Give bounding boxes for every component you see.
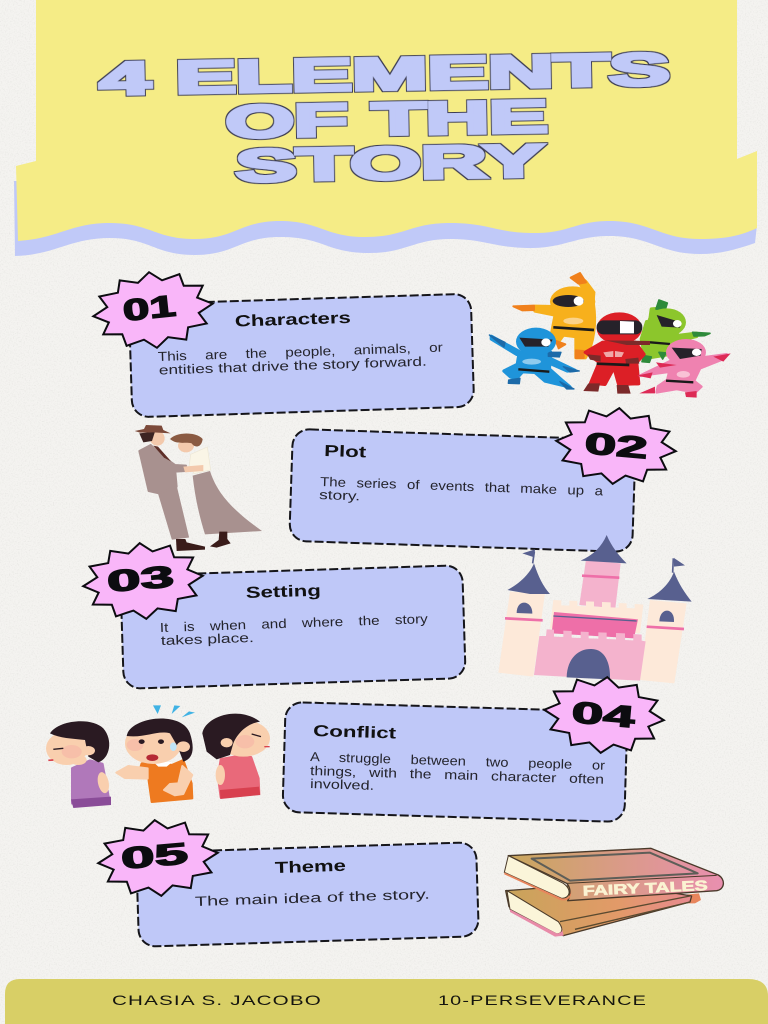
title [99,44,670,191]
panel: plot: Plot [324,443,367,461]
red ranger [583,312,650,394]
panel: plot: The series of events that make up a [320,474,604,498]
man [135,425,205,551]
woman [170,433,262,548]
blue ranger [489,328,579,389]
title: OF THE [225,91,548,147]
panel: theme: 05 [120,837,189,876]
sweat drops [153,705,195,717]
panel: conflict: A struggle between two people or [310,749,606,773]
panel: theme: Theme [275,858,346,877]
book title: FAIRY TALES [582,877,708,899]
panel: setting: 03 [106,560,175,599]
panel: conflict: things, with the main character often [310,763,604,787]
panel: conflict: 04 [570,696,637,735]
panel: setting: takes place. [161,630,254,648]
lower book [506,883,701,937]
header banner [14,0,757,256]
panel: conflict [282,672,667,822]
panel: characters: 01 [121,290,177,328]
class section: 10-PERSEVERANCE [438,992,647,1008]
panel: characters: entities that drive the story forward. [159,354,427,377]
upper book [504,848,723,901]
panel: plot: story. [319,487,360,503]
author name: CHASIA S. JACOBO [112,992,322,1008]
middle child [116,718,193,802]
pink ranger [637,339,731,398]
illustration: three children [46,705,270,808]
panel: characters: Characters [235,310,351,330]
right child [202,714,270,799]
left child [46,721,111,808]
title: STORY [235,135,544,191]
illustration: five colourful rangers [489,273,731,398]
panel: theme [95,815,479,947]
panel: setting: Setting [246,583,321,602]
panel: plot [289,403,679,552]
panel: theme: The main idea of the story. [195,887,430,909]
panel: setting [80,538,466,689]
panel: plot: 02 [583,427,649,465]
panel: conflict: involved. [310,776,374,793]
green ranger [641,300,710,362]
illustration: couple embracing [135,425,262,551]
title: 4 ELEMENTS [99,44,670,104]
panel: conflict: Conflict [313,723,397,742]
illustration: pink castle [498,535,692,683]
panel: characters [89,266,474,417]
footer bar [5,979,768,1024]
illustration: stacked fairy tale books [504,848,723,937]
panel: setting: It is when and where the story [160,611,429,635]
panel: characters: This are the people, animals, or [158,340,444,364]
yellow ranger [513,273,595,358]
